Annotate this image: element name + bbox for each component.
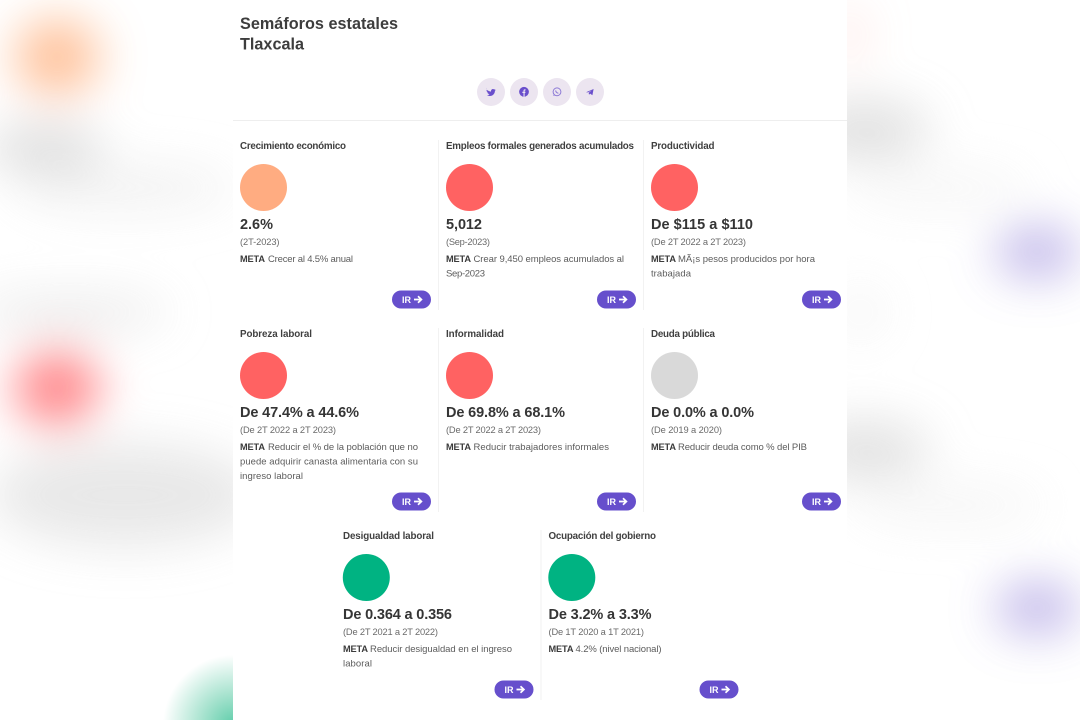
card: Crecimiento económico: Crecimiento económico (240, 141, 346, 152)
card: Productividad: META (651, 254, 676, 264)
status circle: orange (240, 164, 287, 211)
button: IR: IR (402, 295, 412, 305)
button: IR: IR (710, 685, 719, 695)
white page panel (233, 0, 847, 720)
card: Ocupación del gobierno: (De 1T 2020 a 1T 2021) (548, 627, 644, 637)
card: Empleos formales: Sep-2023 (446, 268, 485, 280)
card: Desigualdad laboral: META (343, 644, 368, 654)
card: Pobreza laboral: META (240, 442, 265, 452)
card: Pobreza laboral: puede adquirir canasta alimentaria con su (240, 456, 418, 468)
card: Pobreza laboral: ingreso laboral (240, 471, 303, 482)
card: Crecimiento económico: (2T-2023) (240, 237, 280, 247)
status circle: green (548, 554, 595, 601)
card: Empleos formales: (Sep-2023) (446, 237, 490, 247)
button: IR (392, 290, 431, 308)
button: IR: IR (607, 295, 617, 305)
button: IR (802, 290, 841, 308)
card: Ocupación del gobierno: META (548, 644, 574, 654)
status circle: red (651, 164, 698, 211)
button: IR (597, 492, 636, 510)
card: Informalidad: Reducir trabajadores informales (474, 442, 609, 453)
card: Ocupación del gobierno: Ocupación del gobierno (548, 531, 656, 542)
button: IR: IR (402, 497, 412, 507)
status circle: gray (651, 352, 698, 399)
card: Deuda pública: (De 2019 a 2020) (651, 425, 722, 435)
card: Pobreza laboral: (De 2T 2022 a 2T 2023) (240, 425, 336, 435)
icon: twitter (477, 78, 505, 106)
card: Ocupación del gobierno: De 3.2% a 3.3% (548, 607, 652, 623)
card: Ocupación del gobierno (548, 531, 738, 698)
card: Crecimiento económico: 2.6% (240, 217, 273, 233)
icon: facebook (510, 78, 538, 106)
icon: telegram (576, 78, 604, 106)
status circle: red (446, 164, 493, 211)
card: Desigualdad laboral: (De 2T 2021 a 2T 2022) (343, 627, 438, 637)
button: IR (802, 492, 841, 510)
card: Deuda pública: Reducir deuda como % del PIB (678, 442, 807, 453)
card: Deuda pública: De 0.0% a 0.0% (651, 405, 754, 421)
card: Crecimiento económico (240, 141, 431, 308)
card: Informalidad (446, 329, 636, 510)
card: Productividad: (De 2T 2022 a 2T 2023) (651, 237, 746, 247)
card: Productividad (651, 141, 841, 308)
page content (233, 15, 847, 700)
card: Empleos formales: Empleos formales generados acumulados (446, 141, 635, 152)
button: IR: IR (812, 497, 822, 507)
card: Empleos formales: META (446, 254, 471, 264)
button: IR (392, 492, 431, 510)
status circle: red (240, 352, 287, 399)
status circle: green (343, 554, 390, 601)
card: Productividad: MÃ¡s pesos producidos por hora (678, 254, 816, 265)
title: Tlaxcala (240, 36, 305, 54)
card: Desigualdad laboral: Desigualdad laboral (343, 531, 434, 542)
card: Empleos formales (446, 141, 636, 308)
status circle: red (446, 352, 493, 399)
card: Desigualdad laboral: Reducir desigualdad en el ingreso (370, 644, 512, 655)
card: Pobreza laboral: Pobreza laboral (240, 329, 312, 340)
icon: whatsapp (543, 78, 571, 106)
card: Pobreza laboral (240, 329, 431, 510)
card: Productividad: Productividad (651, 141, 715, 152)
card: Crecimiento económico: Crecer al 4.5% anual (268, 254, 353, 265)
card: Deuda pública (651, 329, 841, 510)
card: Productividad: De $115 a $110 (651, 217, 753, 233)
card: Empleos formales: Crear 9,450 empleos acumulados al (474, 254, 624, 265)
card: Crecimiento económico: META (240, 254, 265, 264)
card: Deuda pública: META (651, 442, 676, 452)
button: IR (597, 290, 636, 308)
card: Informalidad: De 69.8% a 68.1% (446, 405, 565, 421)
card: Desigualdad laboral (343, 531, 534, 698)
card: Productividad: trabajada (651, 268, 692, 280)
card: Informalidad: (De 2T 2022 a 2T 2023) (446, 425, 541, 435)
button: IR: IR (812, 295, 822, 305)
card: Deuda pública: Deuda pública (651, 329, 716, 340)
title (240, 15, 398, 54)
button: IR: IR (607, 497, 617, 507)
card: Informalidad: Informalidad (446, 329, 504, 340)
button: IR (700, 680, 738, 698)
card: Pobreza laboral: Reducir el % de la población que no (268, 442, 418, 453)
card: Informalidad: META (446, 442, 471, 452)
card: Empleos formales: 5,012 (446, 217, 482, 233)
button: IR (494, 680, 534, 698)
card: Ocupación del gobierno: 4.2% (nivel nacional) (576, 644, 662, 655)
button: IR: IR (504, 685, 514, 695)
title: Semáforos estatales (240, 15, 398, 33)
card: Pobreza laboral: De 47.4% a 44.6% (240, 405, 359, 421)
card: Desigualdad laboral: laboral (343, 658, 372, 670)
social share buttons (477, 78, 604, 106)
card: Desigualdad laboral: De 0.364 a 0.356 (343, 607, 452, 623)
